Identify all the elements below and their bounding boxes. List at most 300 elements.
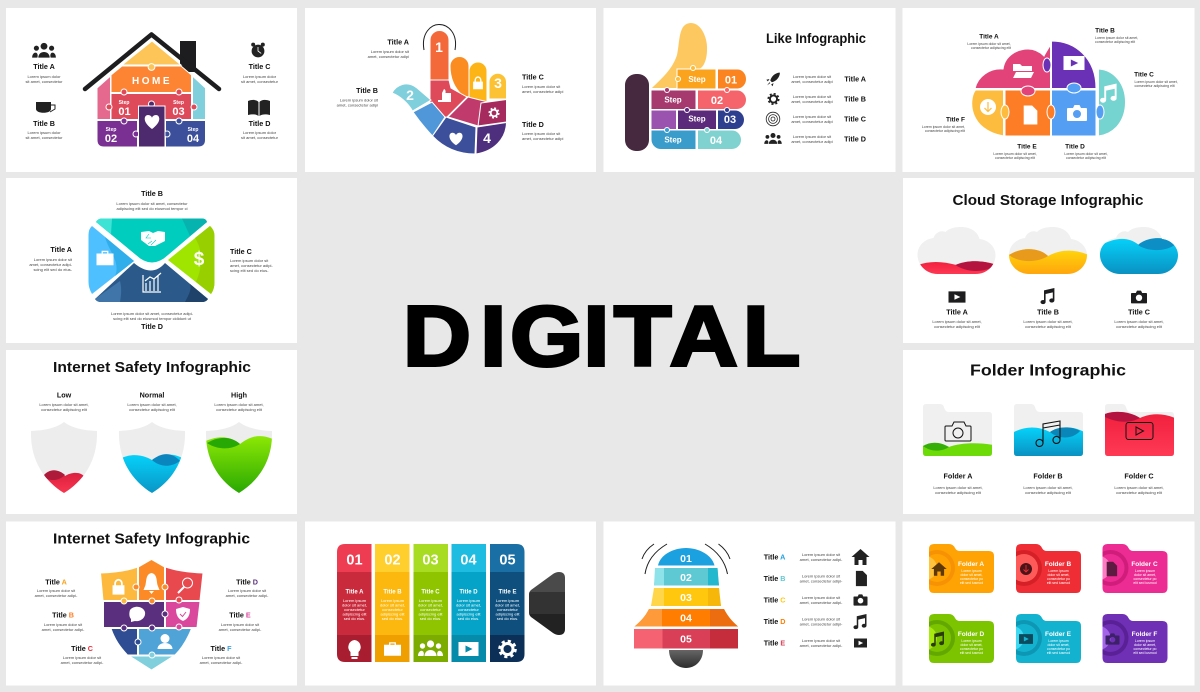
label: folder A: Folder A: [944, 472, 972, 480]
house puzzle: Step: [119, 100, 129, 106]
row D: amet, consectetur adipi-: [800, 622, 843, 626]
bar 03: sed do eius.: [420, 616, 441, 621]
label: high: High: [231, 390, 247, 400]
bar 05: 05: [499, 552, 516, 568]
bar 01: adipiscing elit: [342, 612, 367, 616]
title: Cloud Storage Infographic: [952, 192, 1144, 209]
label: title D: Lorem ipsum dolor sit amet, consectetur adipi-: [111, 311, 194, 316]
bell graphic: 02: [680, 572, 692, 584]
folder: blue: [1014, 404, 1084, 457]
label: title B: Lorem ipsum dolor sit amet, consectetur: [116, 201, 188, 206]
folder F: Folder F: [1132, 631, 1157, 638]
label: folder C: Lorem ipsum dolor sit amet,: [1114, 485, 1164, 490]
house puzzle: 02: [105, 133, 117, 145]
hand puzzle: 4: [483, 130, 491, 146]
row B: Title B: [764, 574, 785, 583]
label: title C: amet, consectetur adipi-: [61, 660, 104, 665]
label: title D: sit amet, consectetur: [241, 135, 279, 140]
label: folder A: Lorem ipsum dolor sit amet,: [933, 485, 983, 490]
label: title A: [29, 245, 73, 272]
label: title D: scing elit sed do eiusmod tempor cididunt ut: [113, 316, 192, 321]
label: title B: [116, 189, 188, 211]
folder E: consectetur po: [1047, 647, 1070, 651]
label: title C: Lorem ipsum dolor sit: [230, 258, 269, 263]
row D: Title D: [844, 134, 866, 144]
label: title C: sit amet, consectetur: [241, 79, 279, 84]
row E: amet, consectetur adipi-: [800, 643, 843, 648]
label: title F: amet, consectetur adipi-: [200, 660, 243, 665]
hand puzzle: [392, 24, 506, 154]
label: title C: [241, 62, 279, 84]
row C: [766, 112, 866, 126]
label: title B: consectetur adipiscing elit: [1025, 324, 1072, 329]
panel: shield puzzle: [6, 522, 297, 686]
label: title E: [219, 610, 262, 632]
bell graphic: 05: [680, 634, 692, 646]
row A: amet, consectetur adipi: [791, 79, 833, 84]
folder C: [1102, 544, 1168, 593]
label: title D: Lorem ipsum dolor: [243, 130, 277, 135]
icon: people: [32, 43, 56, 58]
label: title C: Lorem ipsum dolor sit amet,: [1114, 319, 1164, 324]
folder: green: [923, 404, 993, 457]
thumbs-up puzzle: 02: [711, 95, 723, 107]
house puzzle: 01: [118, 106, 131, 118]
bar 03: dolor sit amet,: [418, 602, 443, 608]
label: title C: Title C: [522, 72, 544, 82]
folder B: consectetur po: [1047, 577, 1070, 581]
label: title A: Lorem ipsum dolor sit amet,: [932, 319, 982, 324]
icon: clock: [251, 43, 265, 57]
folder: red: [1105, 404, 1175, 457]
folder E: [1016, 614, 1081, 663]
bar 03: consectetur: [420, 607, 442, 612]
bar 02: adipiscing elit: [380, 612, 405, 616]
thumbs-up puzzle: Step: [664, 136, 682, 144]
label: title E: Lorem ipsum dolor sit: [221, 622, 260, 627]
label: title A: Lorem ipsum dolor sit amet,: [967, 42, 1011, 46]
label: title C: Lorem ipsum dolor sit: [522, 84, 561, 89]
row B: [764, 571, 867, 586]
bar 05: adipiscing elit: [495, 612, 520, 616]
bar 03: 03: [422, 552, 439, 568]
panel: envelope: [6, 178, 297, 343]
label: title A: [26, 62, 63, 84]
folder E: elit sed iusmod: [1047, 651, 1070, 655]
label: low: Low: [57, 390, 72, 400]
label: title D: Title D: [1065, 144, 1085, 150]
camera lens: [528, 571, 566, 636]
label: folder C: Folder C: [1124, 472, 1154, 480]
thumbs-up puzzle: 03: [724, 114, 736, 126]
row A: [764, 549, 870, 565]
label: title B: Title B: [52, 610, 74, 620]
label: title F: Title F: [210, 644, 232, 653]
house puzzle: 04: [187, 133, 200, 145]
main heading: DIGITAL: [403, 290, 800, 384]
folder C: consectetur po: [1134, 577, 1157, 581]
label: title B: Title B: [1037, 308, 1059, 316]
bar 05: Lorem ipsum: [496, 598, 520, 603]
label: title C: Title C: [1128, 308, 1150, 316]
label: title D: Title D: [249, 119, 270, 128]
bar 01: 01: [346, 552, 363, 568]
label: title B: amet, consectetur adipi-: [42, 627, 85, 632]
bar 03: adipiscing elit: [418, 612, 443, 616]
label: title B: consectetur adipiscing elit: [1095, 40, 1135, 44]
bar 02: sed do eius.: [382, 616, 403, 621]
label: title A: [932, 308, 982, 329]
folder F: [1102, 614, 1168, 663]
folder B: Folder B: [1045, 561, 1071, 568]
bar 01: Lorem ipsum: [343, 598, 367, 603]
folder F: consectetur po: [1134, 647, 1157, 651]
panel: video camera bars: [305, 522, 596, 686]
folder C: dolor sit amet,: [1134, 573, 1156, 577]
label: title A: Title A: [33, 62, 55, 71]
label: title A: consectetur adipiscing elit: [934, 324, 981, 329]
house puzzle: Step: [188, 127, 198, 133]
label: title B: [42, 610, 85, 632]
label: title A: Title A: [979, 34, 999, 40]
label: title A: Title A: [387, 38, 409, 46]
bar 02: dolor sit amet,: [380, 602, 405, 608]
folder C: Lorem ipsum: [1135, 569, 1155, 573]
label: title A: Title A: [45, 578, 67, 586]
label: title C: Lorem ipsum dolor sit amet,: [1134, 80, 1178, 84]
panel: cloud storage: [903, 178, 1194, 343]
bar 02: consectetur: [382, 607, 404, 612]
title: Internet Safety Infographic: [53, 359, 251, 376]
label: title B: Lorem ipsum dolor: [27, 130, 61, 135]
shield: high: [206, 422, 272, 493]
row D: Lorem ipsum dolor sit: [802, 616, 841, 622]
panel: like infographic: [604, 8, 896, 172]
folder D: [929, 614, 994, 663]
bar 04: consectetur: [458, 607, 480, 612]
thumbs-up puzzle: [625, 23, 746, 151]
bar 02: Title B: [383, 590, 402, 596]
label: title C: amet, consectetur adipi-: [230, 263, 273, 268]
row B: amet, consectetur adipi: [791, 99, 833, 104]
bell graphic: [634, 544, 738, 668]
label: title C: scing elit sed do eius-: [230, 268, 269, 273]
label: title E: amet, consectetur adipi-: [219, 627, 262, 632]
label: title B: [26, 119, 63, 140]
label: title C: [1114, 308, 1164, 329]
row B: [768, 94, 866, 104]
label: normal: Normal: [140, 390, 164, 400]
label: title D: Title D: [522, 120, 544, 129]
label: title D: [522, 120, 563, 141]
icon: cup: [36, 102, 55, 113]
row C: amet, consectetur adipi-: [800, 600, 843, 605]
label: title F: consectetur adipiscing elit: [925, 129, 965, 133]
folder A: [929, 544, 994, 593]
folder C: elit sed iusmod: [1133, 581, 1157, 585]
bar 05: Title E: [499, 590, 516, 596]
panel: bell: [604, 522, 896, 686]
row E: Lorem ipsum dolor sit: [802, 638, 841, 643]
row E: Title E: [764, 638, 785, 648]
label: title C: Title C: [1134, 72, 1154, 78]
label: title A: consectetur adipiscing elit: [971, 46, 1011, 50]
row B: amet, consectetur adipi-: [800, 578, 843, 584]
label: title D: Lorem ipsum dolor sit: [228, 588, 267, 593]
cloud: red: [918, 227, 998, 275]
label: title F: Lorem ipsum dolor sit amet,: [922, 125, 965, 129]
folder B: Lorem ipsum: [1048, 569, 1069, 573]
hand puzzle: 3: [494, 75, 502, 91]
label: title A: Lorem ipsum dolor sit: [37, 588, 76, 593]
row A: Title A: [844, 74, 866, 84]
label: folder B: Lorem ipsum dolor sit amet,: [1023, 485, 1073, 490]
label: title B: [337, 86, 379, 108]
label: folder C: [1114, 472, 1164, 495]
label: title B: Title B: [356, 86, 378, 95]
label: title B: amet, consectetur adipi: [337, 102, 378, 108]
label: title F: [922, 116, 965, 133]
bar 01: sed do eius.: [344, 616, 365, 621]
folder A: consectetur po: [960, 577, 983, 581]
label: title A: [368, 38, 410, 59]
label: title E: Title E: [229, 610, 251, 620]
label: title C: amet, consectetur adipi: [522, 89, 563, 94]
label: title E: Lorem ipsum dolor sit amet,: [993, 152, 1037, 156]
bar 04: sed do eius.: [458, 616, 479, 621]
row E: [764, 638, 867, 648]
icon: book: [248, 100, 270, 116]
bar 05: consectetur: [497, 607, 519, 612]
label: title B: Lorem ipsum dolor sit: [44, 622, 83, 627]
label: title D: Title D: [236, 578, 258, 586]
label: folder B: Folder B: [1033, 472, 1063, 480]
folder D: Folder D: [958, 631, 984, 638]
row A: [766, 73, 866, 86]
folder C: Folder C: [1131, 561, 1158, 568]
bar 04: Title D: [459, 590, 478, 596]
panel: folders: [902, 522, 1194, 686]
icon: video: [948, 291, 966, 303]
label: title A: Title A: [50, 245, 72, 254]
bar 04: adipiscing elit: [456, 612, 481, 616]
row A: amet, consectetur adipi-: [800, 557, 843, 562]
shield: low: [31, 422, 97, 493]
label: title D: Lorem ipsum dolor sit amet,: [1064, 152, 1108, 156]
label: title B: [1023, 308, 1073, 329]
label: title F: [200, 644, 243, 665]
bar 05: dolor sit amet,: [495, 602, 520, 608]
label: title B: Lorem ipsum dolor sit amet,: [1095, 36, 1138, 40]
label: title B: Title B: [33, 119, 55, 128]
row A: Title A: [764, 552, 785, 562]
bell graphic: 03: [680, 592, 692, 604]
label: title A: [35, 578, 78, 598]
label: title B: Title B: [1095, 28, 1115, 34]
bar 04: [452, 544, 486, 662]
icon: music: [1040, 288, 1054, 304]
bar 02: [375, 544, 410, 662]
folder D: Lorem ipsum: [961, 639, 982, 643]
label: title C: [522, 72, 563, 94]
label: low: consectetur adipiscing elit: [41, 407, 88, 412]
label: title C: [1134, 72, 1178, 88]
title: Internet Safety Infographic: [53, 530, 250, 548]
house puzzle: Step: [173, 100, 184, 106]
label: title B: [1095, 28, 1138, 44]
label: title E: [993, 144, 1037, 160]
label: folder A: consectetur adipiscing elit: [935, 490, 982, 495]
label: normal: Lorem ipsum dolor sit amet,: [127, 402, 177, 407]
label: title A: amet, consectetur adipi-: [35, 593, 78, 598]
folder E: Folder E: [1045, 631, 1072, 638]
bar 03: Title C: [421, 590, 440, 596]
envelope graphic: [88, 218, 214, 302]
shield puzzle: [100, 560, 203, 670]
folder A: elit sed iusmod: [960, 581, 983, 585]
label: title E: Title E: [1017, 144, 1037, 150]
label: title D: [1064, 144, 1108, 160]
label: title C: [230, 247, 273, 273]
label: high: [214, 390, 264, 412]
label: low: [39, 390, 89, 412]
label: folder B: [1023, 472, 1073, 495]
bar 03: [414, 544, 448, 662]
folder A: Lorem ipsum: [961, 569, 982, 573]
label: title A: Lorem ipsum dolor sit: [371, 49, 410, 54]
folder F: elit sed iusmod: [1133, 651, 1157, 655]
row C: Lorem ipsum dolor sit: [793, 114, 832, 119]
title: Like Infographic: [766, 30, 866, 46]
label: folder A: [933, 472, 983, 495]
bar 01: dolor sit amet,: [342, 602, 367, 608]
folder B: dolor sit amet,: [1048, 573, 1070, 577]
label: title C: Title C: [71, 644, 93, 653]
folder D: dolor sit amet,: [961, 643, 983, 647]
label: title C: Lorem ipsum dolor: [243, 74, 277, 79]
row D: Title D: [764, 617, 785, 626]
row A: Lorem ipsum dolor sit: [802, 552, 841, 557]
folder E: dolor sit amet,: [1048, 643, 1070, 647]
bar 03: Lorem ipsum: [419, 598, 443, 603]
label: title C: consectetur adipiscing elit: [1134, 84, 1175, 88]
folder E: Lorem ipsum: [1048, 639, 1069, 643]
label: title D: amet, consectetur adipi-: [226, 593, 269, 598]
house puzzle: [85, 34, 219, 147]
label: title A: amet, consectetur adipi: [368, 54, 409, 59]
envelope graphic: $: [194, 249, 205, 270]
bar 04: Lorem ipsum: [457, 598, 481, 603]
label: title D: consectetur adipiscing elit: [1066, 156, 1106, 160]
label: folder B: consectetur adipiscing elit: [1025, 490, 1072, 495]
label: folder C: consectetur adipiscing elit: [1116, 490, 1163, 495]
label: title B: adipiscing elit sed do eiusmod tempor ci: [117, 206, 188, 211]
bar 01: [337, 544, 372, 662]
label: title E: consectetur adipiscing elit: [995, 156, 1035, 160]
label: title A: [967, 34, 1011, 50]
label: title F: Title F: [946, 116, 965, 124]
row D: Lorem ipsum dolor sit: [793, 134, 832, 139]
label: title D: Lorem ipsum dolor sit: [522, 131, 561, 136]
folder B: [1016, 544, 1081, 593]
bar 05: [490, 544, 524, 662]
icon: camera: [1131, 291, 1147, 303]
label: title D: [241, 119, 279, 140]
bar 02: Lorem ipsum: [381, 598, 405, 603]
panel: hand puzzle: [305, 8, 596, 172]
row D: [764, 614, 867, 629]
label: title C: Title C: [230, 247, 252, 256]
thumbs-up puzzle: 01: [725, 74, 737, 86]
label: title F: Lorem ipsum dolor sit: [202, 655, 241, 660]
panel: home puzzle: [6, 8, 297, 172]
label: normal: [127, 390, 177, 412]
folder D: consectetur po: [960, 647, 983, 651]
folder F: Lorem ipsum: [1135, 639, 1155, 643]
bell graphic: 04: [680, 612, 692, 624]
bar 04: dolor sit amet,: [456, 602, 481, 608]
bell graphic: 01: [680, 553, 692, 565]
label: title A: scing elit sed do eius-: [34, 267, 73, 272]
row C: [764, 594, 868, 606]
row C: amet, consectetur adipi: [791, 119, 833, 124]
row C: Title C: [764, 596, 785, 604]
panel: folder infographic: [903, 350, 1194, 514]
folder A: Folder A: [958, 561, 984, 568]
bar 05: sed do eius.: [497, 616, 518, 621]
panel: cloud puzzle: [902, 8, 1194, 172]
title: Folder Infographic: [970, 362, 1126, 380]
bar 04: 04: [460, 552, 477, 568]
label: title A: Lorem ipsum dolor sit: [34, 257, 73, 262]
label: normal: consectetur adipiscing elit: [129, 407, 176, 412]
label: title C: [61, 644, 104, 665]
row D: [764, 133, 866, 144]
cloud puzzle: [972, 41, 1126, 136]
hand puzzle: 1: [435, 39, 443, 55]
shield: normal: [119, 422, 185, 493]
folder D: elit sed iusmod: [960, 651, 983, 655]
house puzzle: Step: [106, 127, 116, 133]
thumbs-up puzzle: Step: [688, 114, 706, 124]
label: title C: consectetur adipiscing elit: [1116, 324, 1163, 329]
bar 01: consectetur: [344, 607, 366, 612]
label: title C: Lorem ipsum dolor sit: [63, 655, 102, 660]
label: title D: Title D: [141, 322, 163, 331]
folder A: dolor sit amet,: [961, 573, 983, 577]
row B: Lorem ipsum dolor sit: [793, 94, 832, 99]
row A: Lorem ipsum dolor sit: [793, 74, 832, 79]
panel: internet safety levels: [6, 350, 297, 514]
label: title C: Title C: [249, 62, 270, 71]
label: high: Lorem ipsum dolor sit amet,: [214, 402, 264, 407]
label: high: consectetur adipiscing elit: [216, 407, 263, 412]
thumbs-up puzzle: 04: [710, 135, 723, 147]
bar 02: 02: [384, 552, 401, 568]
label: title B: Lorem ipsum dolor sit amet,: [1023, 319, 1073, 324]
row D: amet, consectetur adipi: [791, 139, 833, 144]
bar 01: Title A: [345, 590, 364, 596]
folder F: dolor sit amet,: [1134, 643, 1156, 647]
label: title A: Lorem ipsum dolor: [27, 74, 61, 79]
label: title A: sit amet, consectetur: [26, 79, 63, 84]
label: low: Lorem ipsum dolor sit amet,: [39, 402, 89, 407]
cloud: yellow: [1009, 227, 1089, 275]
label: title D: amet, consectetur adipi: [522, 136, 563, 141]
cloud: blue: [1098, 227, 1180, 275]
row C: Lorem ipsum dolor sit: [802, 595, 841, 600]
label: title D: [226, 578, 269, 598]
